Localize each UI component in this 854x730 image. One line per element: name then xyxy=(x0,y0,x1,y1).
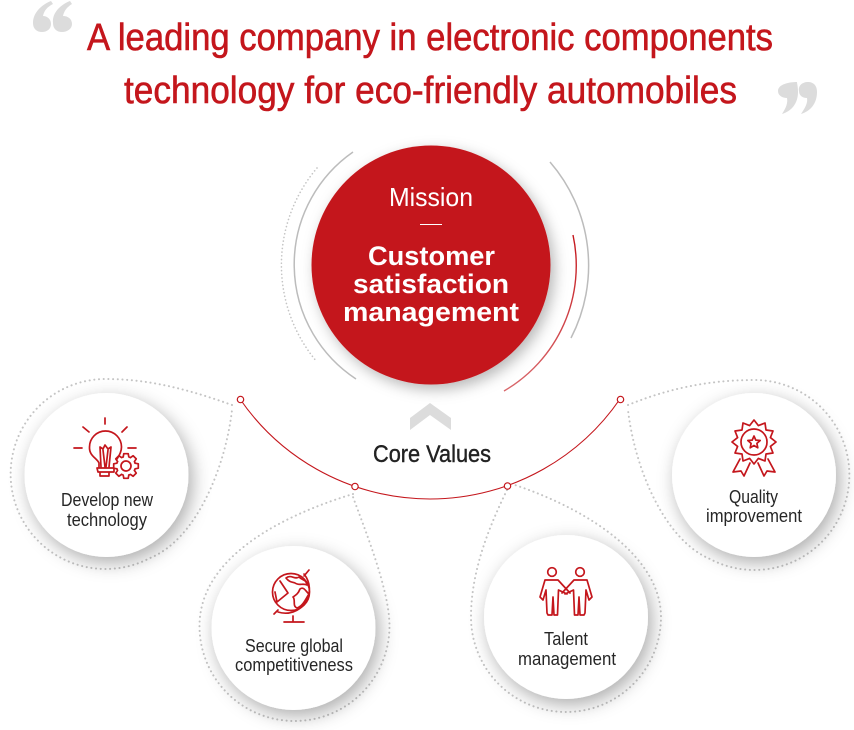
core values heading: Core Values xyxy=(373,441,491,468)
mission orbit arcs xyxy=(281,152,589,391)
panel: talent management xyxy=(484,535,648,699)
mission circle xyxy=(312,146,550,384)
label: talent management: management xyxy=(518,649,616,669)
label: secure global competitiveness: Secure global xyxy=(245,636,343,656)
panel: develop new technology xyxy=(24,393,188,557)
label: secure global competitiveness xyxy=(235,636,353,675)
mission statement xyxy=(343,241,519,327)
label: develop new technology xyxy=(61,490,154,530)
icon: closing quote mark xyxy=(778,82,817,114)
label: quality improvement: improvement xyxy=(706,506,802,526)
mission label: Mission xyxy=(389,182,473,212)
dotted teardrop outlines xyxy=(11,379,849,721)
icon: globe xyxy=(272,570,310,622)
icon: light bulb and gear xyxy=(74,418,138,478)
panel: secure global competitiveness xyxy=(212,546,376,710)
label: talent management xyxy=(518,629,616,669)
mission statement: management xyxy=(343,297,519,327)
label: quality improvement xyxy=(706,487,802,526)
core values arc with nodes xyxy=(237,396,624,499)
mission statement: Customer xyxy=(368,241,495,271)
label: secure global competitiveness: competitiveness xyxy=(235,655,353,675)
mission statement: satisfaction xyxy=(353,269,509,299)
label: develop new technology: Develop new xyxy=(61,490,154,510)
title: technology for eco-friendly automobiles xyxy=(124,70,737,112)
panel: quality improvement xyxy=(672,393,836,557)
icon: chevron up xyxy=(410,403,451,430)
icon: two people shaking hands xyxy=(540,568,592,615)
title xyxy=(87,17,773,112)
title: A leading company in electronic components xyxy=(87,17,773,59)
label: quality improvement: Quality xyxy=(729,487,778,507)
icon: opening quote mark xyxy=(33,1,72,32)
label: develop new technology: technology xyxy=(67,510,147,530)
label: talent management: Talent xyxy=(544,629,588,649)
icon: award rosette xyxy=(732,420,776,476)
